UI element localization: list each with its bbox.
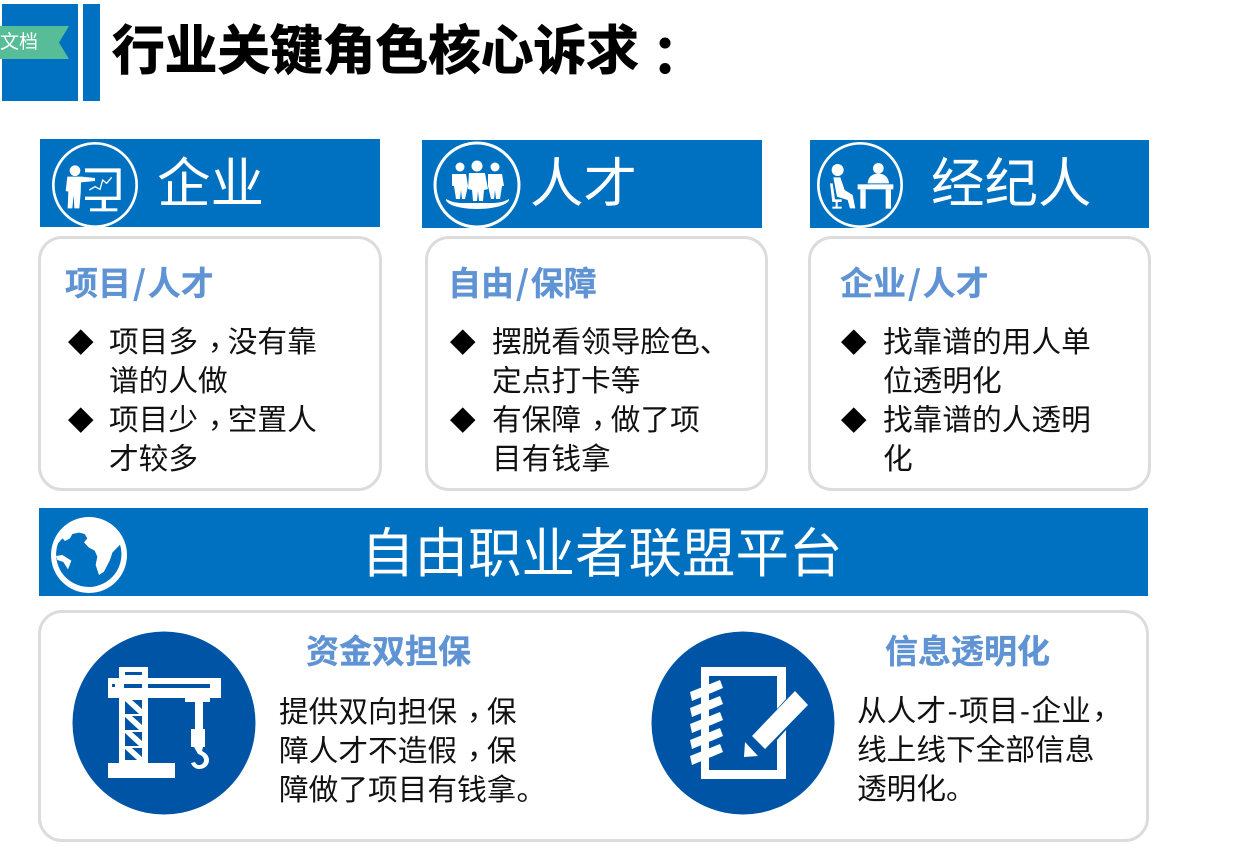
bullet list bbox=[450, 326, 730, 476]
subheading: 企业/人才 bbox=[840, 257, 989, 305]
description bbox=[279, 694, 546, 807]
subheading: 自由/保障 bbox=[448, 257, 597, 305]
bullet list: 谱的人做 bbox=[109, 365, 228, 398]
panel: 人才 card bbox=[425, 236, 768, 491]
description: 线上线下全部信息 bbox=[857, 734, 1094, 767]
panel: platform features bbox=[38, 610, 1149, 842]
bullet list: ， bbox=[208, 324, 238, 357]
description: ， bbox=[1092, 693, 1122, 726]
panel: 人才 header bbox=[422, 140, 762, 228]
heading: 企业: 企业 bbox=[157, 155, 264, 214]
feature: 信息透明化 bbox=[652, 625, 1122, 814]
bullet list bbox=[68, 324, 317, 476]
banner: platform bbox=[39, 508, 1148, 596]
bullet list: 找靠谱的用人单 bbox=[883, 326, 1091, 359]
panel: 企业 card bbox=[38, 236, 382, 491]
green ribbon tag: 文档 bbox=[0, 32, 38, 53]
subheading: 信息透明化 bbox=[885, 625, 1050, 673]
subheading: 项目/人才 bbox=[65, 257, 214, 305]
title: ： bbox=[652, 26, 705, 85]
icon: notebook and pencil bbox=[652, 632, 834, 814]
bullet list: 有保障 做了项 bbox=[492, 404, 700, 437]
bullet list: 项目多 没有靠 bbox=[109, 326, 317, 359]
bullet list: ， bbox=[591, 402, 621, 435]
description bbox=[857, 693, 1122, 806]
icon: group of people bbox=[434, 142, 520, 228]
bullet list: 找靠谱的人透明 bbox=[883, 404, 1091, 437]
panel: 经纪人 header bbox=[810, 140, 1149, 228]
bullet list: 位透明化 bbox=[883, 365, 1002, 398]
bullet list: 才较多 bbox=[109, 443, 198, 476]
description: - bbox=[1020, 695, 1030, 728]
icon: interview at desk bbox=[817, 142, 903, 228]
description: 提供双向担保 保 bbox=[279, 696, 516, 729]
bullet list: 摆脱看领导脸色、 bbox=[492, 326, 730, 359]
icon: globe bbox=[51, 517, 127, 593]
heading: 人才: 人才 bbox=[530, 155, 637, 214]
panel: 企业 header bbox=[40, 139, 380, 227]
icon: crane bbox=[72, 632, 256, 814]
bullet list: ， bbox=[208, 402, 238, 435]
description: 透明化。 bbox=[857, 773, 976, 806]
green ribbon tag bbox=[0, 26, 69, 59]
description: 从人才 项目 企业 bbox=[857, 695, 1091, 728]
bullet list: 目有钱拿 bbox=[492, 443, 611, 476]
description: 障人才不造假 保 bbox=[279, 735, 516, 768]
icon: presenter at chart bbox=[52, 142, 138, 227]
bullet list: 项目少 空置人 bbox=[109, 404, 317, 437]
description: - bbox=[948, 695, 958, 728]
subheading: 资金双担保 bbox=[306, 625, 471, 673]
bullet list: 定点打卡等 bbox=[492, 365, 640, 398]
bullet list: 化 bbox=[883, 443, 913, 476]
bullet list bbox=[841, 326, 1091, 476]
decorative logo block bbox=[2, 4, 100, 101]
feature: 资金双担保 bbox=[72, 625, 546, 814]
description: ， bbox=[467, 733, 497, 766]
description: ， bbox=[467, 694, 497, 727]
heading: platform name: 自由职业者联盟平台 bbox=[361, 525, 842, 584]
panel: 经纪人 card bbox=[808, 236, 1151, 491]
description: 障做了项目有钱拿。 bbox=[279, 774, 546, 807]
heading: 经纪人: 经纪人 bbox=[931, 155, 1092, 214]
title: 行业关键角色核心诉求 bbox=[112, 22, 639, 81]
